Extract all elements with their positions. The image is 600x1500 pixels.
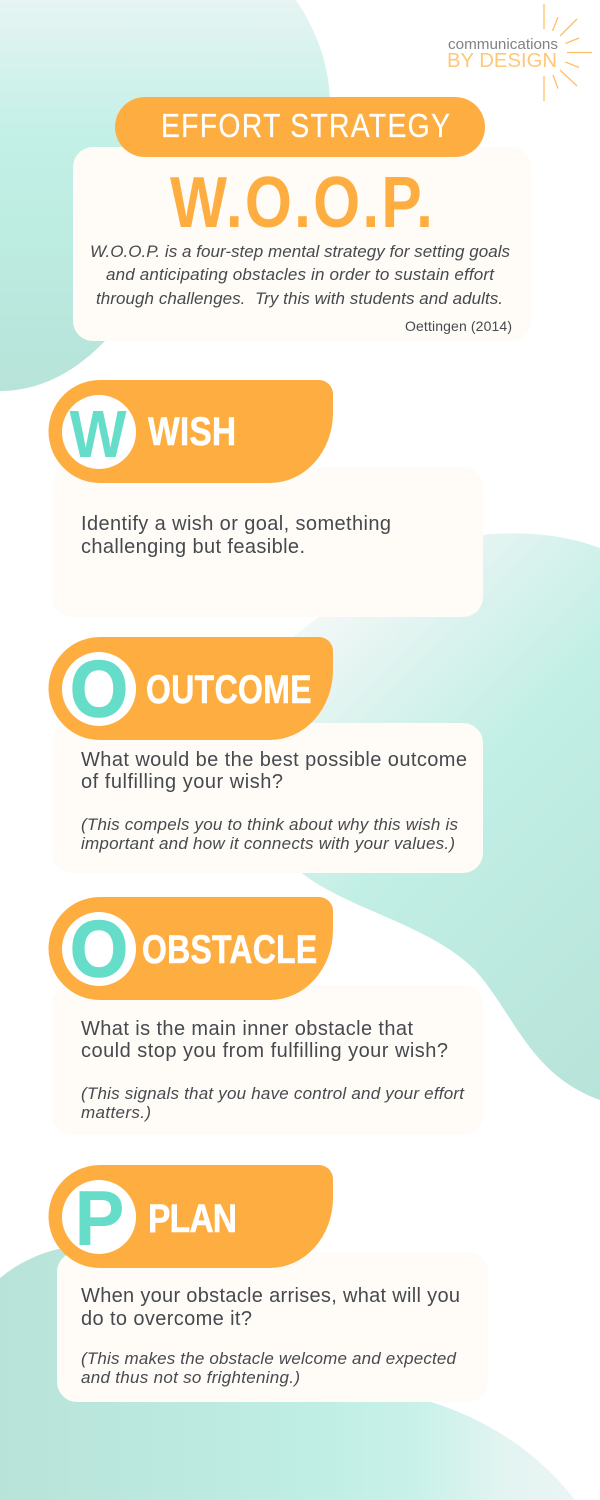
panel: outcome card (52, 723, 483, 873)
intro text: W.O.O.P. is a four-step mental strategy for setting goals (90, 242, 510, 261)
plan header: P (74, 1174, 124, 1262)
title: W.O.O.P. (170, 163, 433, 243)
outcome text (81, 749, 467, 793)
intro text (90, 242, 510, 308)
plan text (81, 1285, 460, 1330)
logo: communications by design: communications (448, 37, 558, 53)
plan note: and thus not so frightening.) (81, 1368, 300, 1387)
plan header (48, 1165, 333, 1268)
plan note (81, 1349, 457, 1387)
wish text (81, 513, 391, 558)
plan note: (This makes the obstacle welcome and expected (81, 1349, 457, 1368)
intro text: and anticipating obstacles in order to sustain effort (106, 265, 495, 284)
obstacle header (48, 897, 333, 1000)
outcome note (81, 815, 458, 853)
wish header: W (70, 397, 127, 472)
wish header (48, 380, 333, 483)
wish header: WISH (148, 409, 236, 454)
obstacle note: matters.) (81, 1103, 151, 1122)
wish text: challenging but feasible. (81, 536, 305, 558)
logo: communications by design: BY DESIGN (447, 50, 557, 72)
obstacle note: (This signals that you have control and your effort (81, 1084, 465, 1103)
obstacle text: could stop you from fulfilling your wish? (81, 1040, 448, 1062)
panel: intro card (73, 147, 531, 341)
panel: obstacle card (52, 985, 483, 1135)
plan text: When your obstacle arrises, what will you (81, 1285, 460, 1307)
outcome text: of fulfilling your wish? (81, 771, 283, 793)
background blob: right (266, 533, 600, 1100)
obstacle text (81, 1018, 448, 1062)
header pill: effort strategy (115, 97, 485, 157)
plan header: PLAN (148, 1196, 237, 1241)
obstacle header: OBSTACLE (142, 927, 317, 972)
wish text: Identify a wish or goal, something (81, 513, 391, 535)
outcome header (48, 637, 333, 740)
outcome text: What would be the best possible outcome (81, 749, 467, 771)
obstacle header: O (70, 904, 128, 993)
logo: communications by design (447, 4, 592, 101)
citation: Oettingen (2014) (405, 318, 512, 334)
obstacle text: What is the main inner obstacle that (81, 1018, 413, 1040)
intro text: through challenges. Try this with students and adults. (96, 289, 503, 308)
plan text: do to overcome it? (81, 1308, 252, 1330)
background blob: top left (0, 0, 330, 391)
outcome header: OUTCOME (146, 667, 312, 712)
outcome header: O (70, 644, 128, 733)
background blob: bottom left (0, 1249, 575, 1500)
outcome note: (This compels you to think about why this wish is (81, 815, 458, 834)
obstacle note (81, 1084, 465, 1122)
header pill: effort strategy: EFFORT STRATEGY (161, 107, 450, 145)
panel: plan card (57, 1252, 488, 1402)
panel: wish card (52, 467, 483, 617)
outcome note: important and how it connects with your values.) (81, 834, 455, 853)
